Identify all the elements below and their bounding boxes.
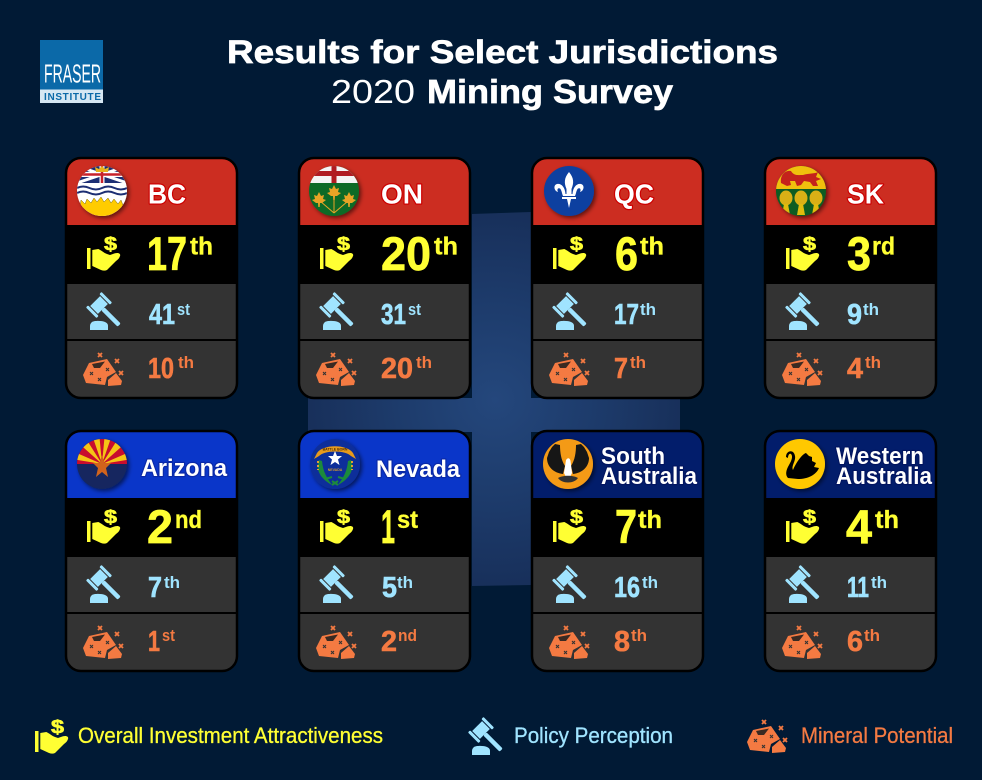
label: Nevada: Nevada [376,456,461,483]
card: South Australia [532,431,703,671]
investment rank row: 3 [847,227,871,280]
investment rank row: $ [803,507,816,527]
policy rank row: 16 [614,572,640,604]
card: BC [66,158,237,398]
policy rank row [785,292,879,333]
mineral rank row [782,626,880,659]
header: SK [765,158,936,225]
card: SK [765,158,936,398]
legend: Overall Investment Attractiveness [35,717,383,754]
legend: Overall Investment Attractiveness: Overall Investment Attractiveness [78,723,383,748]
investment rank row: th [638,506,662,534]
mineral rank row [549,353,646,386]
policy rank row [86,292,190,333]
mineral rank row: 1 [148,626,160,658]
flag: Western Australia [775,439,825,489]
investment rank row: $ [337,234,350,254]
header: ON [299,158,470,225]
flag: Nevada: NEVADA [328,468,343,472]
policy rank row [86,565,180,606]
mineral rank row [316,353,432,386]
label: Western Australia: Western [836,443,924,470]
policy rank row [785,565,887,606]
investment rank row: th [640,232,664,260]
label: Western Australia [836,443,933,490]
investment rank row: 7 [615,500,637,553]
card: ON [299,158,470,398]
investment rank row: th [875,506,899,534]
investment rank row: $ [104,507,117,527]
legend: Mineral Potential [747,720,953,753]
flag: South Australia [543,439,593,489]
investment rank row: 20 [381,227,431,280]
mineral rank row: 6 [847,626,863,658]
legend: Overall Investment Attractiveness: $ [51,717,64,737]
investment rank row: 4 [846,500,872,553]
mineral rank row [782,353,881,386]
label: Arizona: Arizona [141,455,228,482]
investment rank row: $ [104,234,117,254]
flag: British Columbia [77,166,127,216]
policy rank row: 5 [382,572,397,604]
flag: Quebec [544,166,594,216]
logo: Fraser Institute [40,40,103,103]
investment rank row: 6 [615,227,638,280]
mineral rank row: nd [398,626,417,645]
flag: Saskatchewan [776,166,826,216]
policy rank row: st [408,300,421,319]
policy rank row: 9 [847,299,862,331]
investment rank row [320,500,419,553]
investment rank row: nd [175,506,202,534]
mineral rank row [549,626,647,659]
investment rank row: 17 [147,227,187,280]
policy rank row: th [640,300,656,319]
policy rank row: 41 [149,299,175,331]
label: QC: QC [614,178,654,210]
policy rank row: th [871,573,887,592]
card outline [66,431,237,671]
logo: Fraser Institute: INSTITUTE [44,92,101,103]
policy rank row: 7 [148,572,162,604]
card outline [532,431,703,671]
title: Results for Select Jurisdictions [227,34,778,70]
policy rank row: 11 [847,572,869,604]
investment rank row: rd [872,232,895,260]
label: South Australia [601,443,698,490]
label: SK: SK [847,178,884,210]
title: 2020 [331,73,415,110]
title: Mining Survey [427,73,674,110]
investment rank row: th [190,232,213,260]
card: Western Australia [765,431,936,671]
investment rank row: th [434,232,458,260]
card outline [299,431,470,671]
flag: Ontario [309,166,359,216]
mineral rank row: th [178,353,194,372]
mineral rank row: 10 [148,353,174,385]
header: Nevada [299,431,470,498]
flag: Arizona [72,432,132,489]
policy rank row: 17 [614,299,639,331]
mineral rank row: th [864,626,880,645]
policy rank row: st [177,300,190,319]
mineral rank row [83,626,175,659]
legend: Policy Perception [468,717,673,758]
card: Nevada [299,431,470,671]
label: South Australia: South [601,443,665,470]
investment rank row [553,227,664,280]
investment rank row: $ [803,234,816,254]
card outline [765,431,936,671]
card: QC [532,158,703,398]
investment rank row [87,227,213,280]
policy rank row: 31 [381,299,406,331]
policy rank row [319,565,413,606]
label: ON: ON [381,178,423,210]
policy rank row [552,565,658,606]
central glow cross [308,212,680,586]
policy rank row: th [164,573,180,592]
policy rank row: th [397,573,413,592]
investment rank row [786,500,899,553]
title [227,34,778,110]
header: QC [532,158,703,225]
card outline [299,158,470,398]
header: BC [66,158,237,225]
mineral rank row: st [162,626,175,645]
investment rank row: $ [570,234,583,254]
label: South Australia: Australia [601,463,698,490]
investment rank row: 1 [381,500,395,553]
mineral rank row: 8 [614,626,630,658]
mineral rank row: 7 [614,353,628,385]
mineral rank row [83,353,194,386]
label: Western Australia: Australia [836,463,933,490]
mineral rank row: th [416,353,432,372]
investment rank row: $ [570,507,583,527]
mineral rank row: 4 [847,353,863,385]
legend: Mineral Potential: Mineral Potential [801,723,953,748]
mineral rank row: th [865,353,881,372]
investment rank row: 2 [147,500,173,553]
investment rank row [553,500,662,553]
header: South Australia [532,431,703,498]
policy rank row [319,292,421,333]
investment rank row: $ [337,507,350,527]
mineral rank row: 20 [381,353,413,385]
flag: Nevada [310,439,360,489]
header: Western Australia [765,431,936,498]
flag: Nevada: BATTLE BORN [323,448,348,452]
header: Arizona [66,431,237,498]
card: Arizona [66,431,237,671]
card outline [66,158,237,398]
label: BC: BC [148,178,186,210]
investment rank row [320,227,458,280]
policy rank row [552,292,656,333]
card outline [532,158,703,398]
investment rank row: st [397,506,419,534]
legend: Policy Perception: Policy Perception [514,723,673,748]
mineral rank row: 2 [381,626,397,658]
mineral rank row: th [630,353,646,372]
policy rank row: th [863,300,879,319]
policy rank row: th [642,573,658,592]
logo: Fraser Institute: FRASER [44,60,101,88]
card outline [765,158,936,398]
mineral rank row: th [631,626,647,645]
investment rank row [786,227,895,280]
mineral rank row [316,626,417,659]
investment rank row [87,500,202,553]
